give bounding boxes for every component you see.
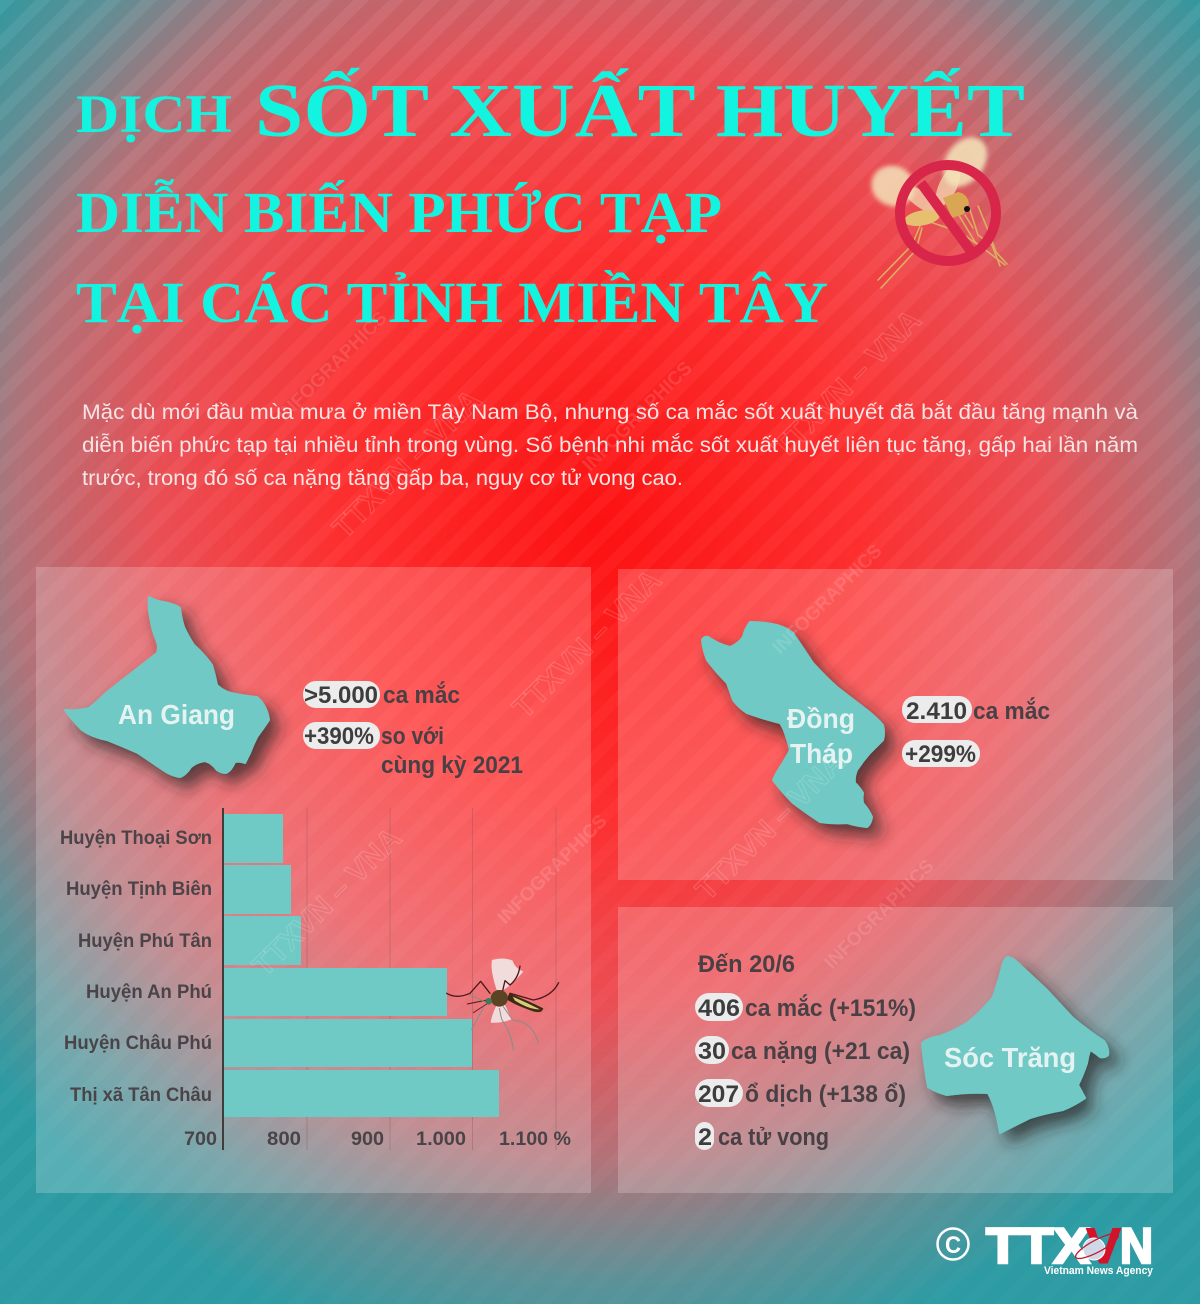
stats: Đồng Tháp: +299% [905,741,976,768]
watermarks: TTXVN – VNA [247,822,408,983]
stats: Sóc Trăng: 406 [698,995,740,1022]
title line 2: DIỄN BIẾN PHỨC TẠP [76,180,722,245]
stats: Sóc Trăng [695,951,916,1151]
stats: Sóc Trăng: Đến 20/6 [698,951,795,978]
map: Đồng Tháp: Tháp [790,738,853,769]
map: Sóc Trăng: Sóc Trăng [944,1042,1076,1073]
intro paragraph: diễn biến phức tạp tại nhiều tỉnh trong vùng. Số bệnh nhi mắc sốt xuất huyết liên tục tăng, gấp hai lần năm [82,434,1138,457]
category labels: Huyện Tịnh Biên [66,878,212,900]
map: An Giang [65,597,269,777]
stats: Sóc Trăng: ca mắc (+151%) [745,994,916,1022]
watermarks: TTXVN – VNA [327,384,488,545]
logo: TTXVN [938,1218,1154,1277]
stats: An Giang: so với [381,723,444,750]
map: Đồng Tháp [702,622,884,827]
stats: Sóc Trăng: 207 [698,1081,739,1108]
icon: crossed-out mosquito [865,129,1007,288]
stats: Đồng Tháp [902,696,1050,768]
category labels: Huyện Phú Tân [78,930,212,952]
intro paragraph: Mặc dù mới đầu mùa mưa ở miền Tây Nam Bộ, nhưng số ca mắc sốt xuất huyết đã bắt đầu tăng mạnh và [82,401,1138,424]
watermarks: TTXVN – VNA [507,564,668,725]
watermarks: TTXVN – VNA [690,746,851,907]
map: Đồng Tháp: Đồng [787,703,855,734]
logo: TTXVN: Vietnam News Agency [1044,1265,1154,1277]
stats: Sóc Trăng: 30 [698,1038,726,1065]
axis labels: 800 [267,1128,301,1150]
category labels: Thị xã Tân Châu [70,1084,212,1106]
bar chart [60,808,571,1150]
stats: An Giang [303,681,523,779]
stats: Sóc Trăng: 2 [698,1124,712,1151]
panel: Đồng Tháp [618,569,1173,880]
icon: copyright: C [945,1232,961,1259]
title [76,68,1025,335]
intro paragraph [82,401,1138,490]
bars [224,814,499,1117]
axis labels: 700 [184,1128,217,1150]
stats: Sóc Trăng: ca tử vong [718,1124,829,1151]
watermarks: INFOGRAPHICS [274,308,392,426]
title line 1: DỊCH [76,84,232,144]
title line 1: SỐT XUẤT HUYẾT [255,68,1025,153]
title line 3: TẠI CÁC TỈNH MIỀN TÂY [76,270,828,335]
category labels: Huyện Châu Phú [64,1032,212,1054]
logo: TTXVN: TTX [986,1218,1090,1274]
stats: Sóc Trăng: ca nặng (+21 ca) [731,1038,910,1065]
category labels: Huyện Thoại Sơn [60,827,212,849]
watermarks: INFOGRAPHICS [769,541,887,659]
panel: Sóc Trăng [618,907,1173,1193]
watermarks: INFOGRAPHICS [821,856,939,974]
stats: An Giang: cùng kỳ 2021 [381,752,523,779]
icon: mosquito [447,958,559,1050]
axis labels: 1.000 [416,1128,466,1150]
category labels: Huyện An Phú [86,981,212,1003]
axis labels: 900 [351,1128,384,1150]
stats: An Giang: +390% [304,723,374,750]
map: An Giang: An Giang [118,699,235,730]
axis labels [184,1128,571,1150]
logo: TTXVN: V [1086,1218,1122,1274]
stats: An Giang: ca mắc [383,681,460,709]
panel: An Giang [36,567,591,1193]
stats: Đồng Tháp: ca mắc [973,697,1050,725]
watermarks: INFOGRAPHICS [579,358,697,476]
intro paragraph: trước, trong đó số ca nặng tăng gấp ba, nguy cơ tử vong cao. [82,467,683,490]
category labels [60,827,212,1106]
watermarks: INFOGRAPHICS [494,811,612,929]
logo: TTXVN: N [1120,1218,1153,1274]
axis labels: 1.100 % [499,1128,571,1150]
stats: Đồng Tháp: 2.410 [906,698,967,725]
map: Sóc Trăng [922,957,1108,1133]
stats: Sóc Trăng: ổ dịch (+138 ổ) [745,1081,906,1108]
watermarks [247,304,939,983]
watermarks: TTXVN – VNA [767,304,928,465]
stats: An Giang: >5.000 [304,682,378,709]
icon: copyright [938,1228,968,1260]
